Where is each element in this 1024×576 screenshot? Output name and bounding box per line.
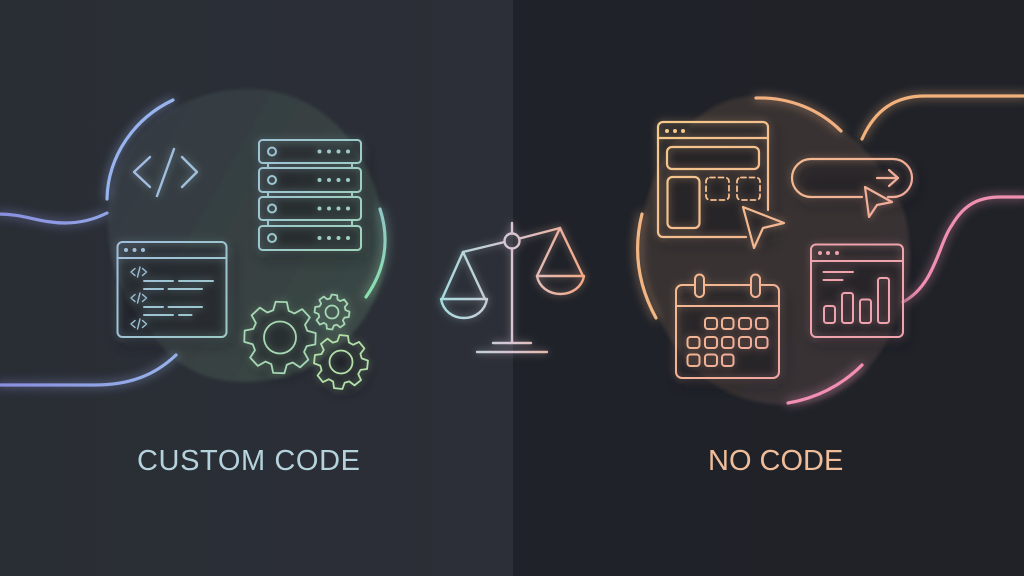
arc: left orange [638, 214, 656, 318]
panel: no code circle [640, 96, 910, 405]
icon: code editor window [118, 242, 226, 337]
panel: custom code background [0, 0, 513, 576]
line: right pink [903, 197, 1024, 302]
icon: balance scale [441, 223, 584, 352]
line: bottom blue [0, 355, 176, 385]
arc: bottom pink [788, 365, 862, 403]
shadows under icons [121, 128, 916, 392]
icon: page builder window with cursor [658, 122, 784, 248]
panel: no code background [513, 0, 1024, 576]
label: no code: NO CODE [708, 445, 843, 477]
icon: server stack [259, 140, 361, 250]
arcs: custom code connectors [0, 100, 385, 385]
label: custom code: CUSTOM CODE [137, 445, 361, 477]
icon: button pill with arrow and cursor [792, 159, 912, 217]
arc: right green [366, 209, 385, 297]
icon: gears [243, 292, 370, 391]
icon: analytics chart window [811, 244, 903, 337]
line: wavy purple [0, 213, 107, 223]
arc: top orange [756, 98, 841, 131]
icon: code brackets [134, 149, 197, 196]
icon: calendar [676, 274, 779, 378]
arc: top left blue [107, 100, 173, 199]
panel: custom code circle [108, 89, 386, 382]
arcs: no code connectors [638, 96, 1024, 403]
line: top right orange [862, 96, 1024, 139]
